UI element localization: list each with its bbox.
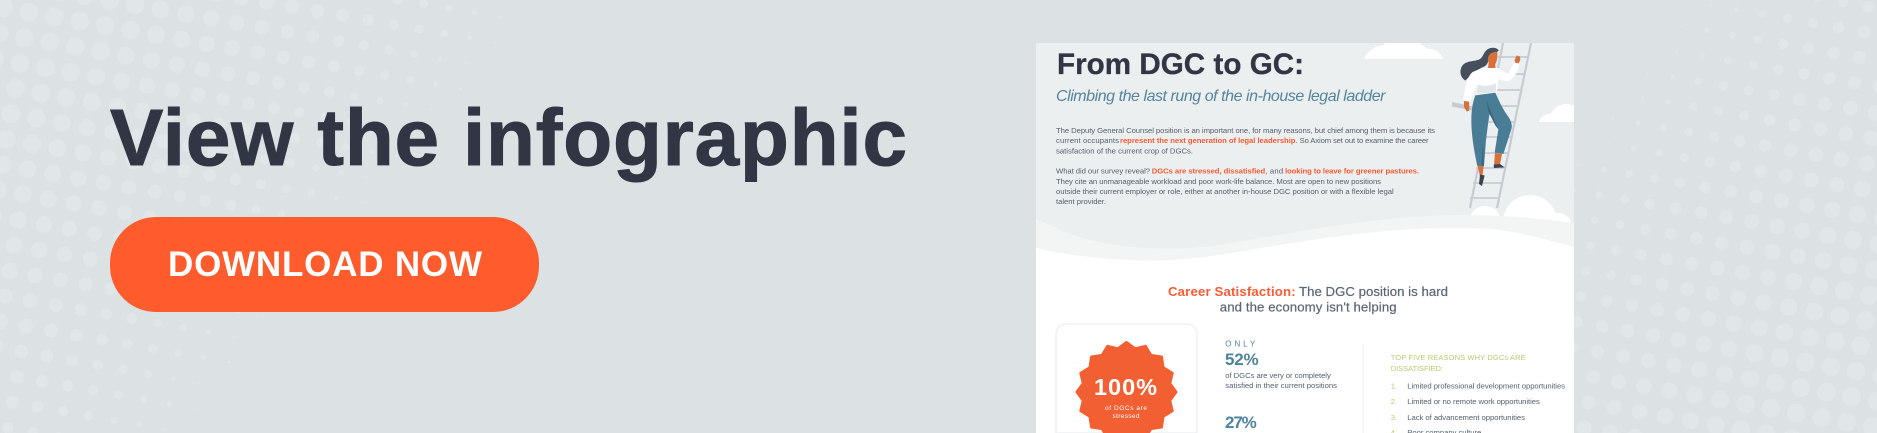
list: top five reasons	[1391, 353, 1565, 433]
icon: clouds	[1364, 43, 1574, 249]
stat: 100%: 100%	[1094, 374, 1157, 400]
text block: introduction paragraph two: outside their current employer or role, either at another in-house DGC position or with a flexible legal	[1056, 187, 1394, 196]
stat: 27%: 27%	[1225, 413, 1257, 432]
list: top five reasons: 1.	[1391, 382, 1397, 391]
text block: introduction paragraph two: , and	[1265, 166, 1283, 176]
badge caption: stressed	[1112, 413, 1140, 420]
stat: only 52% satisfied: satisfied in their current positions	[1225, 381, 1337, 390]
panel: infographic preview	[1036, 43, 1574, 433]
subtitle: Climbing the last rung of the in-house legal ladder	[1056, 88, 1386, 105]
text block: introduction paragraph two: DGCs are stressed, dissatisfied	[1152, 166, 1265, 176]
stat: only 52% satisfied: of DGCs are very or completely	[1225, 371, 1331, 380]
text block: introduction paragraph two	[1056, 166, 1419, 206]
icon: woman climbing ladder	[1452, 48, 1520, 186]
wave: light band	[1036, 215, 1574, 433]
text block: introduction paragraph two: talent provider.	[1056, 197, 1106, 206]
text block: introduction paragraph one: . So Axiom set out to examine the career	[1296, 136, 1429, 145]
text block: introduction paragraph one: The Deputy General Counsel position is an important one, for many reasons, but chief among them is because its	[1056, 126, 1435, 135]
list: top five reasons: 2.	[1391, 397, 1397, 406]
heading: career satisfaction: Career Satisfaction:	[1168, 284, 1296, 299]
heading: career satisfaction	[1168, 284, 1448, 315]
text block: introduction paragraph one	[1056, 126, 1435, 156]
heading: View the infographic: View the infographic	[110, 93, 907, 182]
icon: ladder	[1470, 43, 1531, 208]
heading: career satisfaction: The DGC position is hard	[1299, 284, 1448, 299]
text block: introduction paragraph one: current occupants	[1056, 136, 1119, 145]
text block: introduction paragraph one: satisfaction of the current crop of DGCs.	[1056, 146, 1193, 156]
text block: introduction paragraph two: They cite an unmanageable workload and poor work-life balance. Most are open to new positions	[1056, 177, 1381, 186]
list: top five reasons: Limited or no remote work opportunities	[1407, 397, 1540, 406]
title: From DGC to GC: From DGC to GC:	[1057, 48, 1304, 81]
list: top five reasons: Limited professional development opportunities	[1407, 382, 1565, 391]
badge caption	[1105, 405, 1147, 420]
list: top five reasons: Lack of advancement opportunities	[1407, 413, 1525, 422]
card: 100% stressed badge	[1056, 324, 1197, 433]
wave: white lower section	[1036, 228, 1574, 433]
button: Download now	[110, 217, 539, 312]
text block: introduction paragraph one: represent the next generation of legal leadership	[1120, 136, 1296, 145]
button: Download now: DOWNLOAD NOW	[168, 245, 482, 284]
list: top five reasons: DISSATISFIED:	[1391, 364, 1443, 373]
list: top five reasons: 3.	[1391, 413, 1397, 422]
text block: introduction paragraph two: What did our survey reveal?	[1056, 166, 1150, 176]
stat: only 52% satisfied: ONLY	[1225, 340, 1256, 349]
stat: only 52% satisfied	[1225, 340, 1337, 390]
badge caption: of DGCs are	[1105, 405, 1147, 412]
heading: career satisfaction: and the economy isn't helping	[1220, 300, 1397, 315]
list: top five reasons: TOP FIVE REASONS WHY DGCs ARE	[1391, 353, 1526, 362]
icon: starburst badge	[1077, 342, 1176, 433]
stat: only 52% satisfied: 52%	[1225, 350, 1259, 369]
text block: introduction paragraph two: looking to leave for greener pastures.	[1285, 166, 1419, 176]
